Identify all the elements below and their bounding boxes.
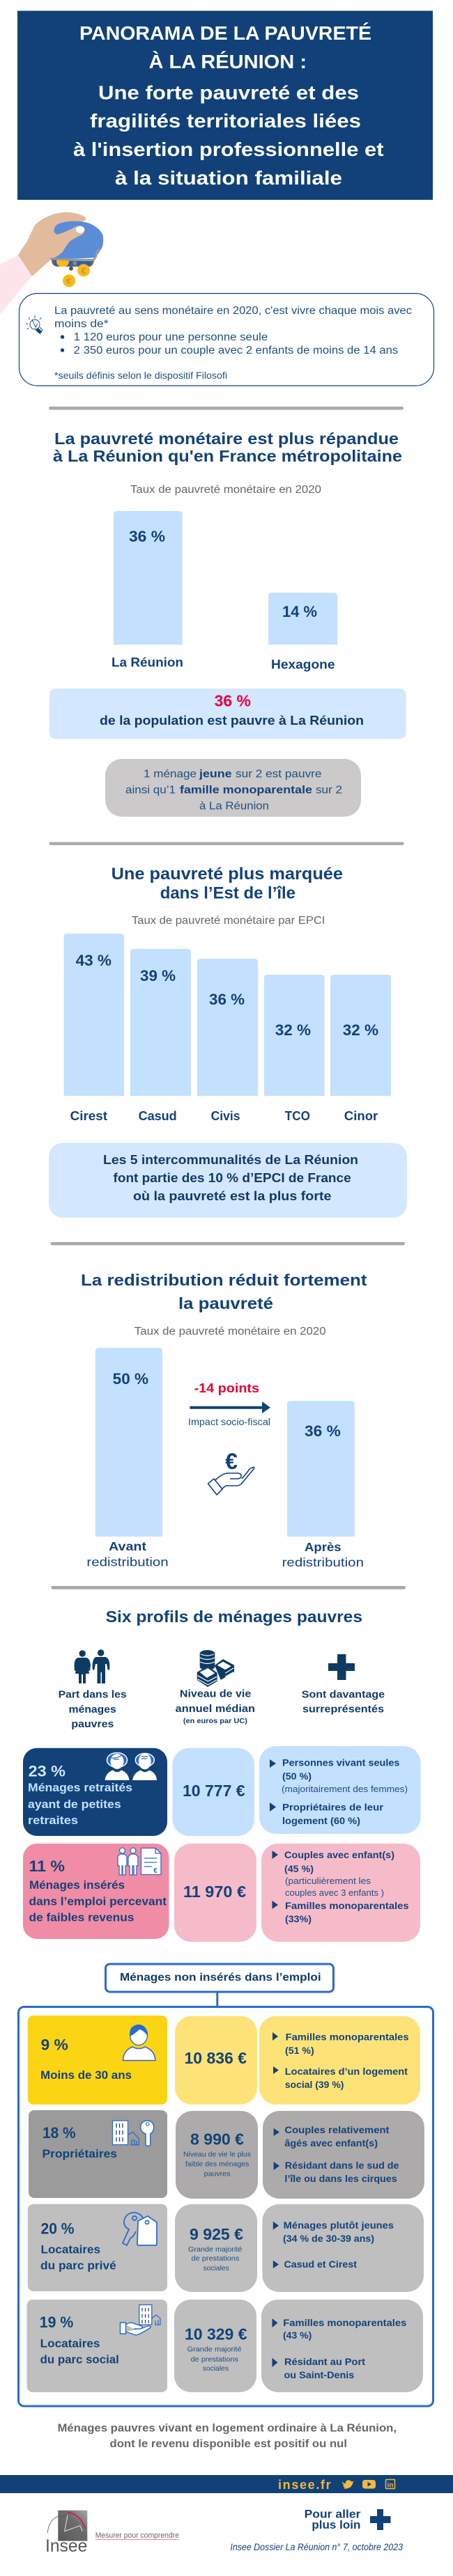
panel: median income [176, 2111, 258, 2199]
title banner: à l'insertion professionnelle et [73, 139, 383, 160]
panel: over-represented groups: l’île ou dans les cirques [284, 2173, 397, 2184]
footnote: Ménages pauvres vivant en logement ordinaire à La Réunion, [57, 2423, 397, 2435]
profile row: social housing tenants [27, 2300, 423, 2392]
panel: over-represented groups: (43 %) [283, 2330, 312, 2341]
panel: over-represented groups: Personnes vivant seules [282, 1757, 400, 1768]
panel: median income: de prestations [191, 2355, 238, 2364]
chart subtitle: Taux de pauvreté monétaire en 2020 [135, 1326, 326, 1337]
panel: over-represented groups: Résidant au Port [284, 2356, 365, 2367]
column header: over-represented groups: surreprésentés [302, 1704, 384, 1715]
title banner [17, 11, 433, 200]
bar chart: poverty rate: 14 % [282, 603, 317, 620]
panel: over-represented groups [259, 2016, 420, 2105]
panel: share [23, 1844, 169, 1939]
column header: share of households [59, 1649, 127, 1730]
panel: over-represented groups: Familles monoparentales [285, 1900, 409, 1911]
label: impact socio-fiscal: Impact socio-fiscal [188, 1417, 270, 1427]
panel: share: 20 % [40, 2220, 74, 2238]
section: poverty by EPCI [49, 865, 407, 1218]
panel: median income: 10 329 € [185, 2325, 247, 2343]
link: further reading [305, 2508, 390, 2531]
bar chart: poverty rate by EPCI: Cirest [70, 1108, 107, 1123]
icon: coins and banknotes [197, 1650, 234, 1687]
icon: euro over open hand [208, 1449, 254, 1495]
bar chart: before and after redistribution [86, 1348, 364, 1569]
section: monetary poverty La Réunion vs Hexagone [49, 430, 406, 817]
profile row: under 30 [28, 2016, 420, 2105]
bar chart: before and after redistribution: redistribution [282, 1555, 364, 1569]
panel: share: du parc privé [40, 2260, 116, 2272]
icon: youtube [362, 2480, 376, 2488]
column header: over-represented groups: Sont davantage [302, 1689, 385, 1701]
panel: share: Ménages insérés [29, 1879, 125, 1892]
footnote [57, 2423, 397, 2450]
icon: hand emptying a purse: € [82, 266, 86, 276]
panel: share: 19 % [40, 2314, 73, 2331]
heading: à La Réunion qu'en France métropolitaine [53, 447, 402, 465]
panel: share: ayant de petites [28, 1798, 121, 1811]
bar chart: poverty rate by EPCI: Casud [139, 1108, 177, 1123]
panel: median income [174, 2300, 256, 2392]
icon: plus [328, 1654, 355, 1680]
footer band [0, 2475, 453, 2493]
callout: 36 % of the population: de la population est pauvre à La Réunion [100, 714, 364, 728]
panel: over-represented groups: social (39 %) [285, 2079, 344, 2090]
callout: poverty definition [20, 294, 433, 386]
title banner: à la situation familiale [115, 167, 342, 189]
panel: share: Propriétaires [42, 2148, 117, 2160]
callout: 36 % of the population: 36 % [215, 692, 251, 710]
callout: young households and single parents: à La Réunion [199, 801, 269, 812]
panel: share: de faibles revenus [29, 1912, 134, 1924]
bar chart: poverty rate by EPCI: 32 % [343, 1021, 378, 1039]
panel: share: Locataires [40, 2244, 100, 2256]
panel: median income: 10 777 € [183, 1782, 245, 1800]
profile row: low-income workers [23, 1844, 420, 1942]
panel: share: Ménages retraités [28, 1782, 132, 1794]
panel: over-represented groups: (45 %) [284, 1863, 314, 1874]
heading [112, 865, 343, 903]
title banner: À LA RÉUNION : [149, 51, 307, 72]
arrow: socio-fiscal impact [190, 1401, 270, 1413]
heading: la pauvreté [178, 1294, 273, 1312]
panel: median income: Grande majorité [188, 2245, 243, 2254]
panel: share [23, 1748, 167, 1836]
callout: young households and single parents: jeune [199, 769, 232, 780]
bar chart: poverty rate by EPCI [64, 934, 391, 1123]
icon: linkedin: in [387, 2481, 393, 2490]
panel: median income: 11 970 € [183, 1883, 246, 1901]
callout: 5 intercommunalités: où la pauvreté est la plus forte [133, 1189, 332, 1203]
footer band: insee.fr [278, 2478, 331, 2492]
callout: young households and single parents: 1 ménage [144, 769, 197, 780]
logo: Insee: Insee [45, 2536, 87, 2556]
panel: over-represented groups: Ménages plutôt jeunes [284, 2220, 394, 2231]
panel: median income: 10 836 € [184, 2049, 247, 2067]
icon: twitter [342, 2480, 354, 2489]
bar chart: poverty rate by EPCI: Cinor [344, 1108, 378, 1123]
chart subtitle: Taux de pauvreté monétaire par EPCI [132, 915, 325, 927]
panel: share: 18 % [43, 2124, 76, 2142]
bar chart: poverty rate by EPCI: Civis [211, 1108, 240, 1123]
callout: poverty definition: 2 350 euros pour un couple avec 2 enfants de moins de 14 ans [74, 345, 398, 356]
footnote: dont le revenu disponible est positif ou nul [110, 2438, 347, 2450]
panel: median income: 9 925 € [190, 2225, 243, 2243]
icon: hand emptying a purse [0, 212, 103, 314]
panel: share: Moins de 30 ans [40, 2069, 132, 2082]
panel: median income: Niveau de vie le plus [183, 2151, 251, 2159]
section: redistribution [81, 1271, 367, 1569]
callout: young households and single parents: sur 2 [316, 785, 342, 796]
heading: La pauvreté monétaire est plus répandue [54, 430, 399, 448]
profile row: low-pension retirees [23, 1746, 421, 1836]
panel: share: retraites [28, 1814, 78, 1827]
heading: dans l’Est de l’île [160, 884, 295, 903]
callout: poverty definition: moins de* [54, 318, 109, 330]
icon: linkedin [386, 2480, 394, 2490]
icon: light bulb [26, 315, 43, 333]
callout: young households and single parents: sur 2 est pauvre [236, 769, 322, 780]
panel: over-represented groups: Couples avec enfant(s) [284, 1849, 394, 1860]
label: households outside employment [106, 1964, 333, 1992]
panel: share: Locataires [40, 2338, 100, 2350]
panel: median income: Grande majorité [187, 2346, 242, 2354]
panel: over-represented groups: (50 %) [282, 1770, 312, 1782]
panel: over-represented groups: logement (60 %) [282, 1815, 360, 1826]
callout: 5 intercommunalités [49, 1143, 407, 1218]
logo: Insee: Mesurer pour comprendre [95, 2531, 179, 2540]
panel: share: du parc social [40, 2354, 119, 2366]
column header: median living standard: annuel médian [176, 1703, 255, 1715]
column header: over-represented groups [302, 1654, 385, 1715]
panel: median income: de prestations [191, 2254, 239, 2263]
panel: over-represented groups [262, 2204, 424, 2292]
panel: over-represented groups: Familles monoparentales [283, 2317, 407, 2328]
callout: 36 % of the population [49, 689, 406, 739]
panel: over-represented groups: (majoritairement des femmes) [282, 1784, 408, 1794]
icon: building and key [113, 2121, 154, 2146]
icon: elderly couple [105, 1753, 157, 1780]
bar chart: before and after redistribution: 50 % [113, 1370, 148, 1388]
panel: over-represented groups: (33%) [285, 1913, 312, 1924]
panel: over-represented groups: Familles monoparentales [286, 2032, 409, 2043]
panel: share [29, 2110, 167, 2198]
panel: share [27, 2300, 167, 2392]
panel: over-represented groups: (34 % de 30-39 ans) [283, 2233, 374, 2244]
panel: over-represented groups: Résidant dans le sud de [285, 2160, 399, 2171]
bar chart: poverty rate [112, 511, 337, 671]
panel: over-represented groups [261, 2300, 423, 2392]
panel: median income [175, 2016, 257, 2105]
bar chart: poverty rate by EPCI: 36 % [209, 991, 245, 1008]
column header: median living standard [176, 1650, 255, 1725]
bar chart: before and after redistribution: Avant [109, 1539, 146, 1553]
panel: over-represented groups: Propriétaires de leur [282, 1802, 384, 1813]
panel: over-represented groups: (51 %) [285, 2045, 314, 2056]
panel: over-represented groups: couples avec 3 enfants ) [285, 1888, 384, 1898]
panel: over-represented groups: Locataires d’un logement [285, 2066, 408, 2077]
panel: over-represented groups [263, 2111, 424, 2199]
panel: over-represented groups: Couples relativement [284, 2124, 390, 2135]
bar chart: poverty rate: La Réunion [112, 654, 183, 670]
chart subtitle: Taux de pauvreté monétaire en 2020 [130, 484, 321, 496]
panel: share: 23 % [29, 1763, 66, 1780]
panel: households outside employment [18, 2006, 433, 2406]
panel: median income: 8 990 € [190, 2130, 244, 2149]
panel: share [28, 2016, 167, 2105]
bar chart: poverty rate by EPCI: 43 % [76, 952, 112, 969]
icon: young person [123, 2025, 155, 2061]
label: households outside employment: Ménages non insérés dans l’emploi [120, 1972, 321, 1984]
link: further reading: plus loin [312, 2519, 360, 2531]
panel: median income [175, 2204, 257, 2292]
panel: over-represented groups: (particulièrement les [285, 1876, 371, 1886]
panel: share: 11 % [29, 1858, 65, 1875]
column header: share of households: ménages [69, 1704, 116, 1715]
bar chart: poverty rate by EPCI: 32 % [275, 1021, 311, 1039]
callout: young households and single parents [105, 759, 361, 817]
panel: median income [174, 1844, 256, 1942]
title banner: fragilités territoriales liées [90, 110, 361, 132]
callout: young households and single parents: famille monoparentale [180, 785, 312, 796]
icon: hand emptying a purse: € [66, 276, 71, 286]
icon: plus [370, 2509, 390, 2530]
panel: median income [173, 1748, 254, 1836]
callout: 5 intercommunalités: Les 5 intercommunalités de La Réunion [103, 1153, 358, 1167]
panel: median income: sociales [203, 2364, 229, 2373]
bar chart: poverty rate by EPCI: 39 % [140, 967, 176, 984]
callout: poverty definition: 1 120 euros pour une personne seule [74, 331, 268, 343]
bar chart: poverty rate: 36 % [129, 528, 165, 545]
column header: share of households: pauvres [71, 1718, 114, 1730]
icon: euro over open hand: € [225, 1449, 238, 1474]
callout: poverty definition: La pauvreté au sens monétaire en 2020, c'est vivre chaque mois avec [54, 305, 412, 317]
column header: median living standard: (en euros par UC) [183, 1718, 247, 1725]
panel: median income: pauvres [204, 2170, 230, 2178]
callout: poverty definition: *seuils définis selon le dispositif Filosofi [54, 370, 227, 381]
panel: share [28, 2204, 167, 2291]
bar chart: before and after redistribution: redistribution [86, 1555, 169, 1569]
panel: median income: faible des ménages [185, 2160, 249, 2169]
heading: Une pauvreté plus marquée [112, 865, 343, 883]
link: further reading: Pour aller [305, 2508, 361, 2521]
bar chart: poverty rate: Hexagone [271, 657, 335, 671]
callout: 5 intercommunalités: font partie des 10 % d’EPCI de France [113, 1171, 351, 1185]
profile row: private tenants [28, 2204, 424, 2292]
panel: over-represented groups [259, 1746, 421, 1834]
heading [53, 430, 402, 465]
bar chart: before and after redistribution: 36 % [305, 1422, 341, 1440]
logo: Insee [45, 2511, 179, 2556]
heading: six profiles: Six profils de ménages pauvres [106, 1608, 362, 1626]
title banner: Une forte pauvreté et des [98, 82, 359, 103]
callout: young households and single parents: ainsi qu’1 [125, 785, 176, 796]
icon: workers and pay slip [118, 1848, 161, 1875]
bar chart: poverty rate by EPCI: TCO [285, 1108, 310, 1123]
panel: over-represented groups [261, 1844, 420, 1942]
icon: workers and pay slip: € [153, 1867, 158, 1875]
column header: median living standard: Niveau de vie [180, 1688, 251, 1700]
icon: people [74, 1649, 110, 1683]
title banner: PANORAMA DE LA PAUVRETÉ [79, 22, 371, 44]
icon: keys and tag [123, 2213, 157, 2245]
bar chart: before and after redistribution: Après [305, 1540, 341, 1554]
panel: median income: sociales [204, 2264, 229, 2272]
column header: share of households: Part dans les [59, 1689, 127, 1701]
profile row: owners [29, 2110, 424, 2199]
panel: over-represented groups: Casud et Cirest [284, 2259, 357, 2270]
label: -14 points: -14 points [194, 1381, 259, 1395]
panel: share: 9 % [40, 2036, 68, 2054]
heading [81, 1271, 367, 1312]
panel: over-represented groups: âgés avec enfant(s) [284, 2137, 378, 2149]
panel: share: dans l’emploi percevant [29, 1896, 167, 1908]
icon: hand holding building [120, 2304, 160, 2335]
panel: over-represented groups: ou Saint-Denis [284, 2369, 355, 2380]
heading: La redistribution réduit fortement [81, 1271, 367, 1289]
source: Insee Dossier La Réunion n° 7, octobre 2023 [230, 2542, 403, 2552]
